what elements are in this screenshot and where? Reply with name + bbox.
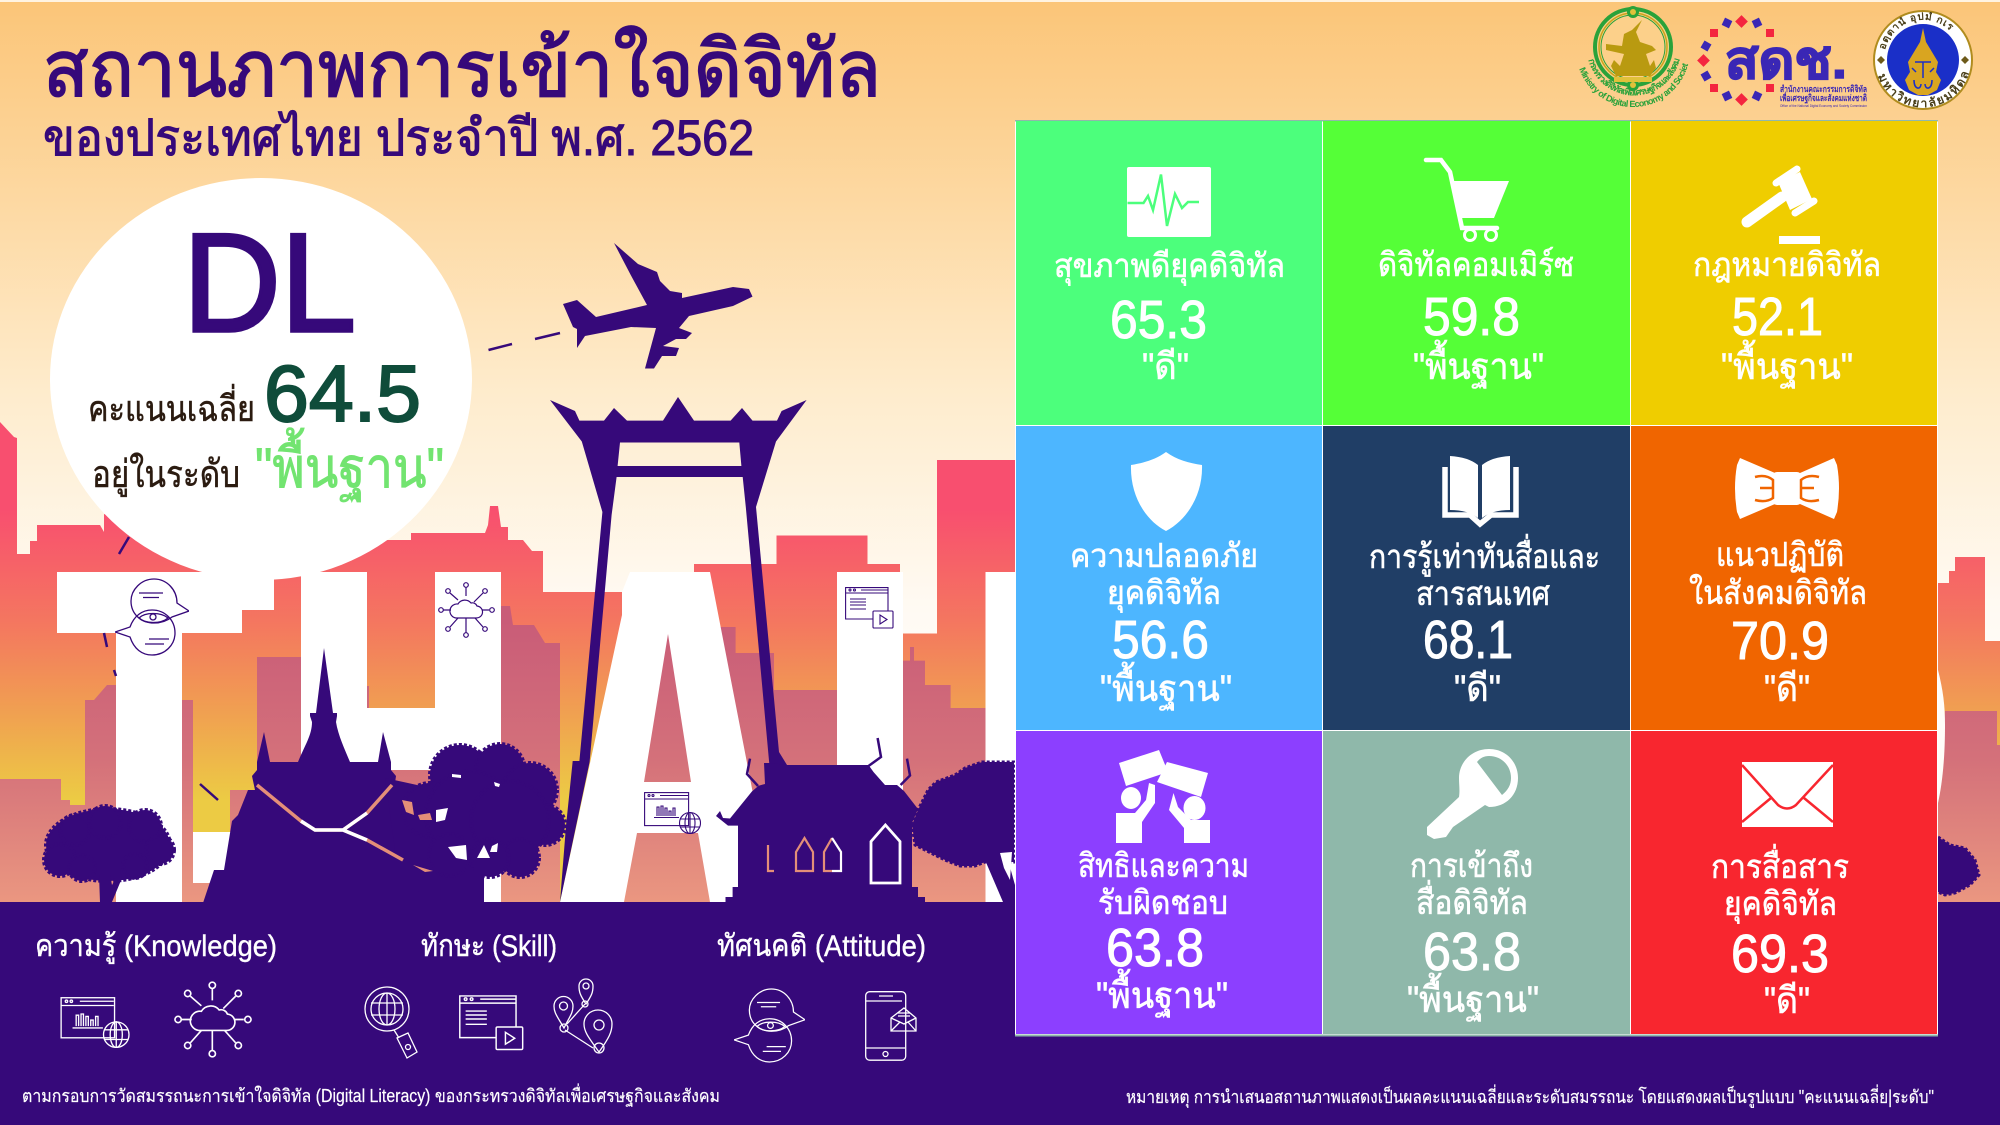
title: แนวปฏิบัติ xyxy=(1716,536,1844,573)
title: ยุคดิจิทัล xyxy=(1107,574,1221,613)
title: การสื่อสาร xyxy=(1711,844,1849,885)
title xyxy=(1078,847,1249,921)
score: 68.1 xyxy=(1423,610,1513,670)
level: "พื้นฐาน" xyxy=(1096,968,1228,1018)
title: ยุคดิจิทัล xyxy=(1724,885,1837,924)
logo: ONDE: สำนักงานคณะกรรมการดิจิทัล xyxy=(1780,84,1867,94)
title xyxy=(1410,847,1533,921)
title: สารสนเทศ xyxy=(1416,575,1550,612)
icon: envelope xyxy=(1742,762,1833,827)
skyline: front buildings xyxy=(0,606,986,902)
title: ความปลอดภัย xyxy=(1070,537,1258,574)
logo: Mahidol University xyxy=(1873,10,1973,110)
level value: "พื้นฐาน" xyxy=(255,428,444,501)
letter A xyxy=(560,572,774,902)
thai pavilion xyxy=(716,738,925,902)
score: 52.1 xyxy=(1732,287,1823,347)
average score value: 64.5 xyxy=(264,349,421,438)
icon: book xyxy=(1445,456,1516,524)
giant swing xyxy=(550,397,807,902)
panel: media literacy xyxy=(1323,426,1630,730)
panel: digital commerce xyxy=(1323,121,1630,425)
icon on A: browser chart xyxy=(645,793,700,834)
level: "พื้นฐาน" xyxy=(1721,339,1853,389)
title xyxy=(1369,534,1600,612)
letter I xyxy=(837,572,903,902)
title: การรู้เท่าทันสื่อและ xyxy=(1369,534,1600,577)
title: สื่อดิจิทัล xyxy=(1416,880,1528,921)
title: กฎหมายดิจิทัล xyxy=(1693,246,1881,283)
title: สุขภาพดียุคดิจิทัล xyxy=(1054,247,1285,286)
average score label: คะแนนเฉลี่ย xyxy=(88,384,255,429)
icon on I: browser doc xyxy=(846,588,893,628)
icon: cart xyxy=(1426,160,1509,240)
score: 59.8 xyxy=(1423,287,1520,347)
skyline: back buildings xyxy=(0,422,1015,902)
skyline: right of grid xyxy=(1938,557,2000,902)
level: "ดี" xyxy=(1764,668,1810,709)
panel: digital access xyxy=(1323,731,1630,1034)
icon: bow tie xyxy=(1735,458,1839,519)
icon: shield xyxy=(1131,452,1202,531)
title: ดิจิทัลคอมเมิร์ซ xyxy=(1378,246,1574,283)
level: "พื้นฐาน" xyxy=(1407,972,1539,1022)
white letters THAI xyxy=(57,572,1016,902)
title: รับผิดชอบ xyxy=(1098,884,1228,921)
title xyxy=(1070,537,1258,613)
score: 65.3 xyxy=(1110,290,1207,350)
title xyxy=(1711,844,1849,924)
logo: ministry xyxy=(1579,6,1688,107)
level label: อยู่ในระดับ xyxy=(92,453,240,497)
title xyxy=(1689,536,1867,611)
score: 69.3 xyxy=(1731,924,1829,984)
title: สิทธิและความ xyxy=(1078,847,1249,884)
icon: chat eye xyxy=(734,989,805,1062)
tree middle xyxy=(385,744,565,903)
icon: pulse xyxy=(1127,167,1211,237)
panel: digital law xyxy=(1631,121,1937,425)
icon: gavel xyxy=(1747,169,1820,244)
panel: rights and responsibilities xyxy=(1016,731,1322,1034)
icon: cloud network xyxy=(175,982,251,1057)
logo: Mahidol University: มหาวิทยาลัยมหิดล xyxy=(1878,72,1969,108)
icon: browser chart xyxy=(61,998,129,1048)
panel: digital etiquette xyxy=(1631,426,1937,730)
score: 70.9 xyxy=(1731,611,1829,671)
title: สถานภาพการเข้าใจดิจิทัล xyxy=(43,25,881,113)
logo: ONDE xyxy=(1697,15,1867,108)
logo: ministry: กระทรวงดิจิทัลเพื่อเศรษฐกิจและสังคม xyxy=(1588,58,1680,96)
icon: key xyxy=(1427,749,1518,839)
dot ring xyxy=(1701,18,1762,101)
grid frame xyxy=(1015,120,1938,1036)
letter L xyxy=(986,572,1016,902)
panel: digital health xyxy=(1016,121,1322,425)
DL heading: DL xyxy=(183,204,356,361)
score: 63.8 xyxy=(1423,922,1521,982)
bottom purple band xyxy=(0,902,2000,1125)
icon on H: cloud xyxy=(439,583,494,637)
panel: digital safety xyxy=(1016,426,1322,730)
title: ในสังคมดิจิทัล xyxy=(1689,574,1867,611)
subtitle: ของประเทศไทย ประจำปี พ.ศ. 2562 xyxy=(43,110,754,166)
logo: ONDE: Office of the National Digital Economy and Society Commission xyxy=(1780,103,1867,108)
title: การเข้าถึง xyxy=(1410,847,1533,884)
circle: DL score xyxy=(50,178,472,580)
score: 56.6 xyxy=(1112,610,1209,670)
level: "ดี" xyxy=(1142,346,1189,387)
icon: phone mail xyxy=(866,992,916,1060)
icon on T: chat xyxy=(115,579,189,655)
tree right xyxy=(912,762,1015,902)
white patch xyxy=(193,832,231,883)
logo: Mahidol University: อตฺตานํ อุปมํ กเร xyxy=(1880,12,1954,50)
footnote left: ตามกรอบการวัดสมรรถนะการเข้าใจดิจิทัล (Digital Literacy) ของกระทรวงดิจิทัลเพื่อเศรษฐกิจและสังคม xyxy=(22,1083,720,1107)
panel: digital communication xyxy=(1631,731,1937,1034)
logo: ONDE: เพื่อเศรษฐกิจและสังคมแห่งชาติ xyxy=(1780,91,1867,104)
heading: knowledge: ความรู้ (Knowledge) xyxy=(35,930,277,964)
letter T xyxy=(57,572,274,902)
plane path dashes xyxy=(104,333,560,800)
level: "ดี" xyxy=(1764,980,1810,1021)
letter H xyxy=(301,572,501,902)
white circle xyxy=(50,178,472,580)
icon: map pins xyxy=(554,979,612,1053)
airplane xyxy=(563,243,752,368)
level: "พื้นฐาน" xyxy=(1100,661,1232,711)
golden mount temple xyxy=(203,648,445,903)
level: "พื้นฐาน" xyxy=(1413,339,1544,389)
level: "ดี" xyxy=(1454,668,1501,709)
pavilion windows xyxy=(768,825,900,883)
icon: people with signs xyxy=(1116,750,1210,843)
icon: browser document xyxy=(460,996,523,1050)
icon: magnifier globe xyxy=(365,987,417,1058)
heading: attitude: ทัศนคติ (Attitude) xyxy=(717,930,926,963)
score: 63.8 xyxy=(1106,918,1204,978)
temple chain lines xyxy=(257,785,403,860)
logo: ONDE: สดช. xyxy=(1725,32,1847,90)
heading: skill: ทักษะ (Skill) xyxy=(421,930,557,963)
tree left xyxy=(44,806,174,902)
